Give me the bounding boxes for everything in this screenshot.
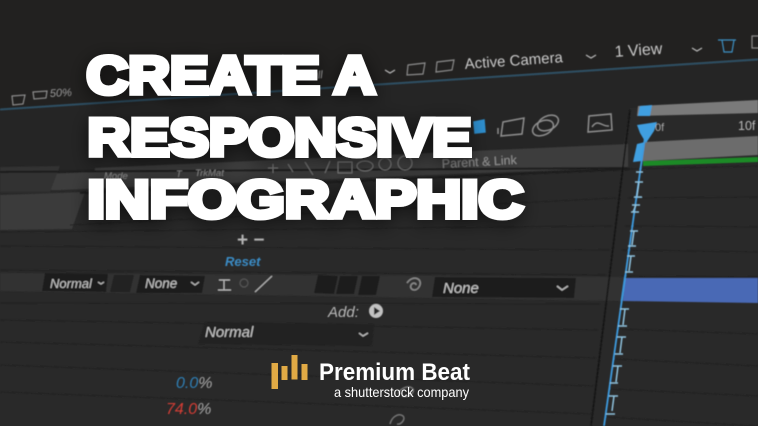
background: software interface: Parent & Link bbox=[441, 153, 518, 171]
time band bbox=[642, 136, 758, 161]
toolbar labels: 50% bbox=[50, 87, 72, 100]
toolbar icons bbox=[12, 36, 758, 105]
layer row lines bbox=[0, 166, 758, 426]
playhead bbox=[604, 130, 646, 426]
background: software interface: 1 View bbox=[614, 41, 663, 61]
background: software interface: Reset bbox=[225, 254, 261, 269]
opacity values: 0.0% bbox=[176, 375, 212, 392]
background: software interface: Active Camera bbox=[464, 49, 564, 73]
background: software interface: Normal bbox=[50, 276, 93, 291]
panel icons bbox=[474, 112, 612, 139]
background: software interface: T bbox=[176, 169, 183, 180]
logo: PremiumBeat bbox=[272, 355, 470, 400]
background: software interface: TrkMat bbox=[195, 168, 224, 179]
background: software interface: 10f bbox=[738, 119, 756, 133]
green work bar bbox=[643, 157, 758, 166]
background: software interface: None bbox=[145, 276, 177, 291]
work area ruler bbox=[637, 100, 758, 116]
column header labels: Mode bbox=[104, 171, 128, 182]
layer controls: + − bbox=[237, 230, 264, 251]
add button bbox=[369, 304, 383, 318]
background: software interface: 74.0% bbox=[166, 401, 211, 418]
title line 1: CREATE A bbox=[86, 46, 376, 106]
icon: gold equalizer bars bbox=[272, 355, 308, 389]
header band bbox=[0, 144, 628, 190]
timeline divider bbox=[591, 110, 630, 426]
background: software interface: None bbox=[443, 280, 479, 297]
selected layer row bbox=[0, 273, 625, 301]
title bbox=[86, 46, 524, 230]
logo tagline: a shutterstock company bbox=[334, 384, 469, 400]
background: software interface: Add: bbox=[327, 304, 359, 321]
keyframe markers bbox=[606, 172, 643, 414]
blend mode dropdown bbox=[198, 322, 374, 346]
title line 2: RESPONSIVE bbox=[88, 108, 472, 168]
toolbar accent line bbox=[0, 58, 758, 110]
blue layer bar bbox=[623, 278, 758, 303]
background: software interface: Normal bbox=[205, 324, 254, 341]
timecode labels: 0f bbox=[655, 122, 665, 134]
background: software interface: ull bbox=[311, 69, 324, 82]
title line 3: INFOGRAPHIC bbox=[88, 170, 524, 230]
logo wordmark: Premium Beat bbox=[319, 359, 470, 386]
